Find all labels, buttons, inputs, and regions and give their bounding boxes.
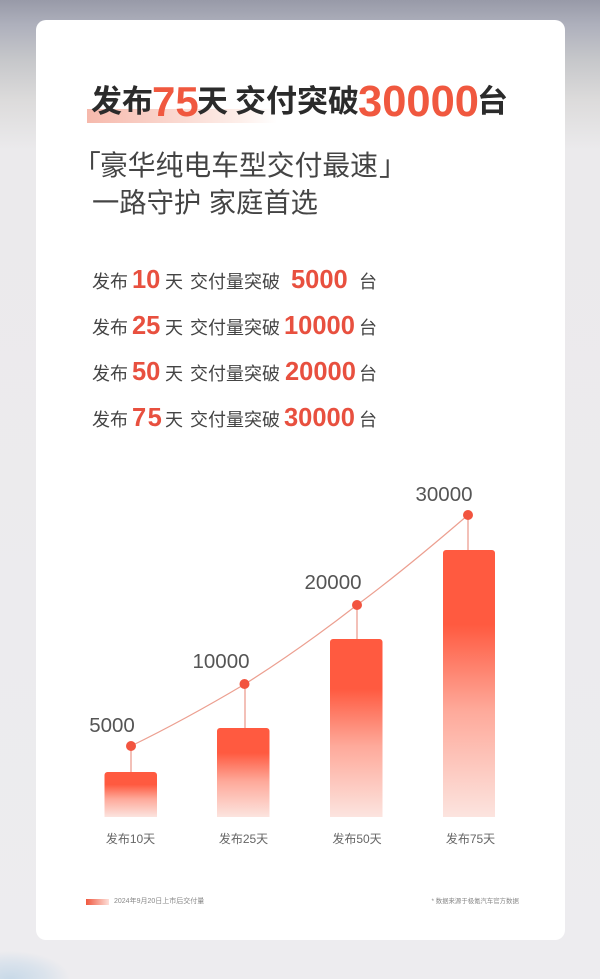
title: 交付突破 [235,84,359,119]
title: 30000 [358,78,479,126]
title: 发布 [91,84,153,119]
subtitle: 「 [73,150,101,181]
stat row: 10 days [92,266,377,294]
axis labels: 发布50天 [332,831,382,846]
background cloud [0,945,170,979]
title [91,78,508,126]
stat row: 75 days: 天 [165,410,183,430]
title: 台 [477,84,508,119]
connector stems [131,515,468,772]
stat row: 50 days [92,358,377,386]
stat row: 25 days: 台 [359,318,377,338]
stat row: 10 days: 交付量突破 [190,272,280,292]
stat row: 25 days: 发布 [92,318,128,338]
trend line [131,515,468,746]
stat row: 25 days: 10000 [284,312,355,340]
legend text: 2024年9月20日上市后交付量 [114,898,204,905]
stat row: 25 days [92,312,377,340]
stat row: 50 days: 台 [359,364,377,384]
axis labels: 发布25天 [219,831,268,846]
value labels: 10000 [192,650,250,673]
value labels: 30000 [415,483,473,506]
subtitle: 豪华纯电车型交付最速 [100,150,378,181]
stat row: 75 days: 交付量突破 [190,410,280,430]
axis labels: 发布75天 [446,831,495,846]
stat row: 25 days: 交付量突破 [190,318,280,338]
stat row: 75 days: 75 [132,404,163,432]
value labels: 20000 [304,571,362,594]
axis labels [106,831,495,846]
legend swatch [86,899,109,905]
stat row: 50 days: 交付量突破 [190,364,280,384]
stat row: 50 days: 50 [132,358,160,386]
stat row: 50 days: 天 [165,364,183,384]
value labels [89,483,473,737]
bar chart [89,483,495,846]
stat row: 50 days: 20000 [285,358,356,386]
stat row: 75 days [92,404,377,432]
stat row: 50 days: 发布 [92,364,128,384]
stat row: 75 days: 发布 [92,410,128,430]
bars [104,550,495,817]
stat row: 10 days: 发布 [92,272,128,292]
title underline [87,109,277,123]
stat row: 10 days: 天 [165,272,183,292]
title: 天 [197,84,228,119]
value labels: 5000 [89,714,135,737]
stat row: 25 days: 天 [165,318,183,338]
title: 75 [152,78,199,125]
source note: * 数据来源于极氪汽车官方数据 [432,898,519,905]
stat row: 10 days: 5000 [291,266,348,294]
stat row: 75 days: 台 [359,410,377,430]
trend points [126,510,473,751]
stat row: 75 days: 30000 [284,404,355,432]
stat row: 10 days: 10 [132,266,160,294]
axis labels: 发布10天 [106,831,155,846]
subtitle [73,150,407,218]
stat row: 10 days: 台 [359,272,377,292]
subtitle: 一路守护 家庭首选 [92,187,318,218]
stat row: 25 days: 25 [132,312,160,340]
subtitle: 」 [379,150,407,181]
